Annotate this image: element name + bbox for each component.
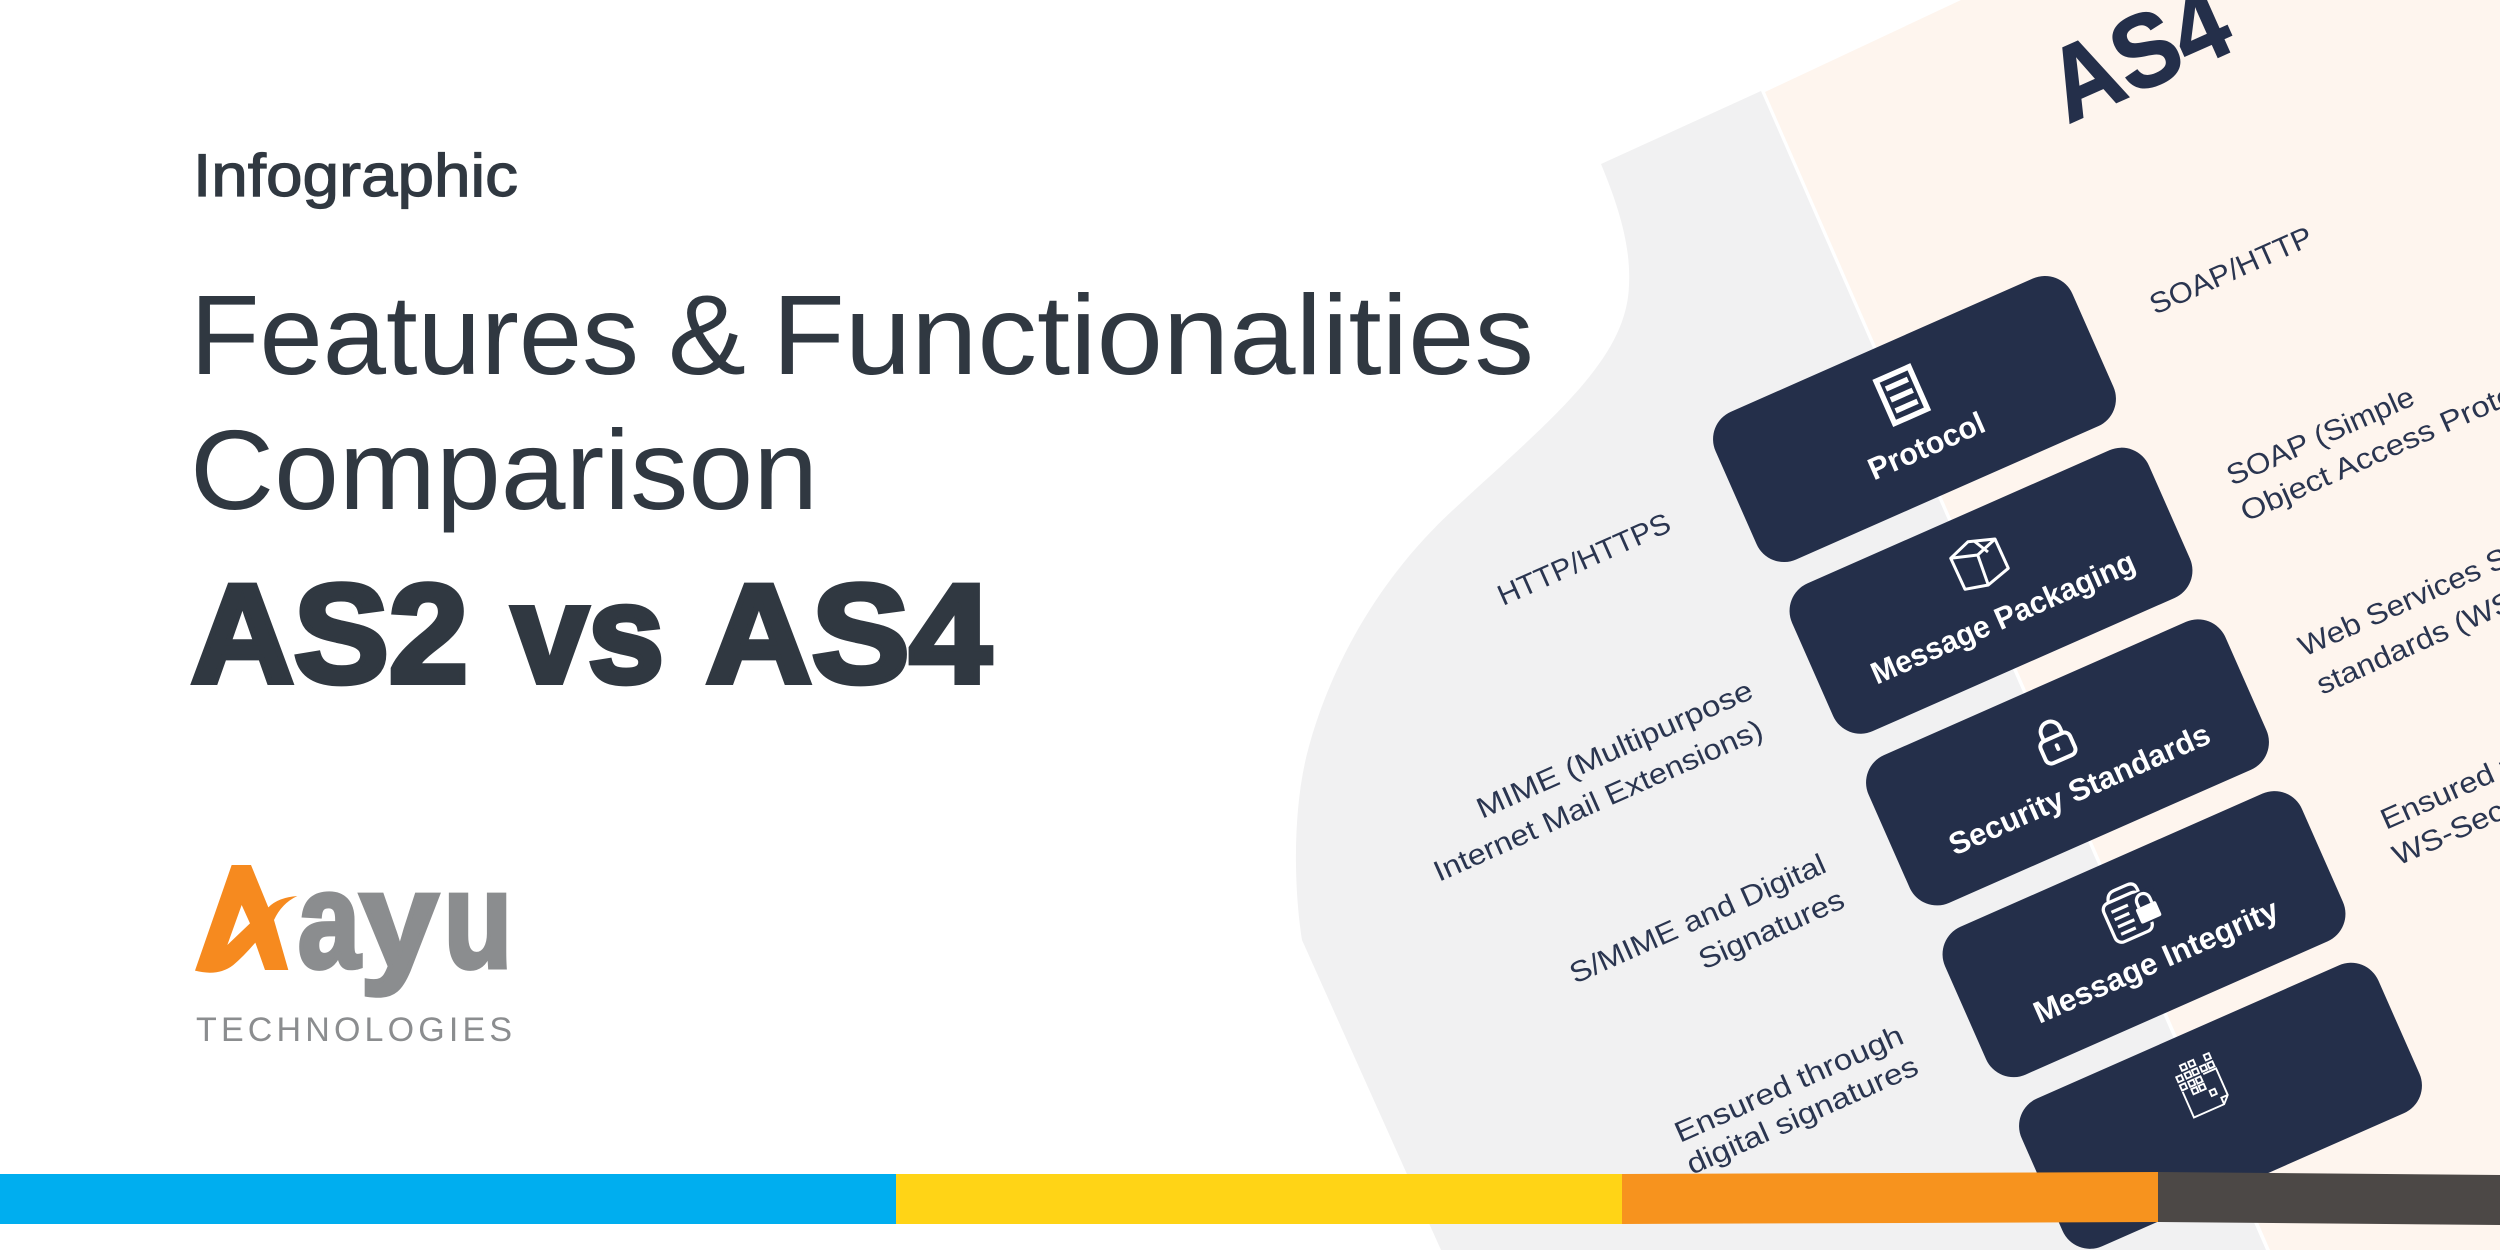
value: AS2 security standards: Signatures	[1694, 884, 1849, 976]
title: Features & Functionalities Comparison: Functionalities	[772, 272, 1534, 398]
card label: Protocol	[1863, 405, 1990, 487]
icon: orange A mark	[195, 865, 297, 973]
logo word: ayu: a	[298, 844, 361, 996]
title: AS2 vs AS4: AS2	[191, 555, 468, 712]
logo word: ayu	[298, 844, 512, 996]
logo word: Technologies: TECHNOLOGIES	[196, 1011, 512, 1049]
card: Protocol	[1703, 266, 2126, 572]
value: AS2 security standards: S/MIME and Digital	[1565, 848, 1831, 990]
footer colour bar	[0, 1172, 2500, 1225]
value: AS2 protocol: HTTP/HTTPS	[1493, 508, 1676, 612]
value: AS2 message packaging: Internet Mail Extensions)	[1429, 714, 1768, 888]
icon: box	[1951, 539, 2008, 589]
title: Features & Functionalities Comparison: &	[668, 272, 746, 398]
card: Message Packaging	[1780, 438, 2202, 743]
value: AS2 message integrity	[1670, 1020, 1923, 1181]
icon: padlock	[2032, 716, 2077, 765]
panel: AS2 column background	[1296, 91, 2266, 1250]
icon: document with lock	[2097, 876, 2168, 944]
card: fifth, icon only	[2009, 953, 2432, 1250]
value: AS2 message packaging	[1429, 675, 1768, 888]
icon: grid document	[2173, 1053, 2231, 1118]
label: Infographic: Infographic	[193, 142, 518, 209]
value: AS2 message integrity: Ensured through	[1670, 1020, 1908, 1149]
card label: Message Integrity	[2028, 892, 2284, 1030]
value: AS2 message packaging: MIME (Multipurpose	[1472, 675, 1758, 825]
card label: Message Packaging	[1865, 544, 2140, 691]
logo word: ayu: y	[360, 844, 438, 996]
value: AS4 protocol: SOAP/HTTP	[2145, 221, 2318, 321]
title: AS2 vs AS4	[191, 555, 991, 712]
title: Features & Functionalities Comparison: Comparison	[190, 407, 818, 533]
card label: Security Standards	[1943, 716, 2215, 862]
title: Features & Functionalities Comparison: Features	[190, 272, 639, 398]
value: AS4 message packaging: SOAP (Simple	[2222, 381, 2419, 492]
title: Features & Functionalities Comparison	[190, 272, 1534, 533]
logo word: ayu: u	[444, 844, 512, 996]
value: AS2 message integrity: digital signatures	[1682, 1050, 1923, 1181]
icon: document	[1876, 367, 1928, 423]
panel: AS4 column background	[1765, 0, 2500, 1250]
title: AS2 vs AS4: AS4	[706, 555, 991, 712]
card: Message Integrity	[1933, 782, 2355, 1087]
logo: Aayu Technologies	[195, 844, 512, 1049]
title: AS2 vs AS4: vs	[512, 555, 664, 712]
card: Security Standards	[1856, 610, 2279, 915]
